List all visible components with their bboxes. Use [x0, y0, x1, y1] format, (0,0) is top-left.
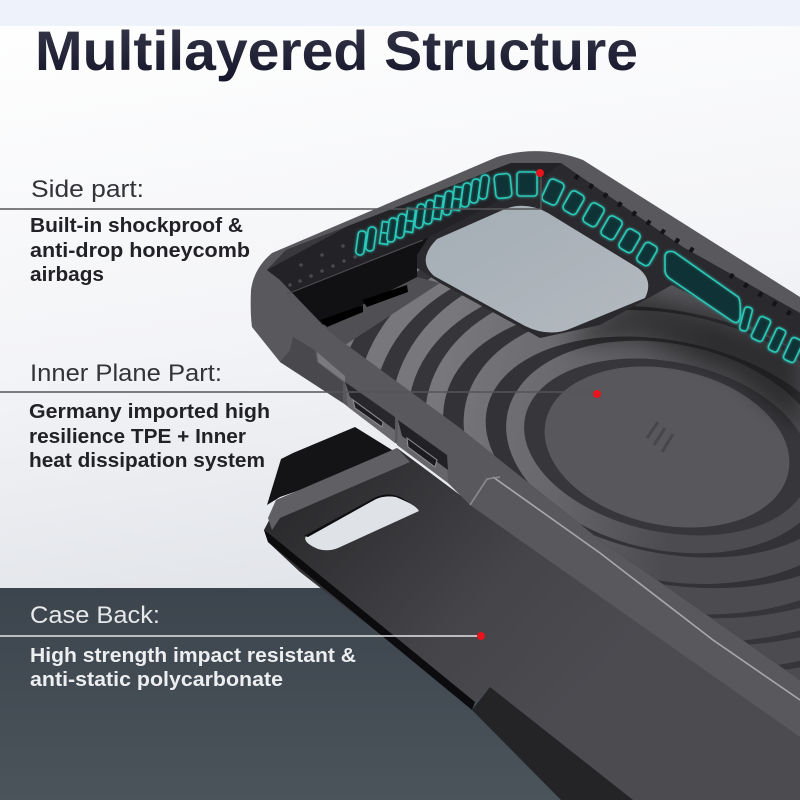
label: inner plane part: Inner Plane Part:: [30, 360, 222, 387]
text: case back description: [30, 645, 356, 691]
text: inner plane part description: heat dissipation system: [29, 450, 265, 472]
panel: case back band: [0, 588, 800, 800]
logo marks: [647, 422, 673, 452]
back plate dark left edge: [264, 530, 475, 710]
honeycomb airbags: [355, 172, 800, 363]
cavity light line: [287, 240, 423, 294]
side notch: [470, 477, 500, 505]
text: side part description: anti-drop honeycomb: [30, 240, 250, 262]
callout: case back: [0, 602, 485, 691]
dot: inner plane part: [593, 390, 601, 398]
text: inner plane part description: Germany imported high: [29, 401, 270, 423]
text: case back description: anti-static polycarbonate: [30, 669, 283, 691]
magnetic circle: [544, 366, 790, 528]
dot: side part: [536, 169, 544, 177]
text: inner plane part description: resilience TPE + Inner: [29, 426, 246, 448]
back plate top strip: [268, 448, 410, 530]
rim ticks: [575, 176, 800, 320]
camera slot shadow: [304, 494, 412, 537]
leader line: inner plane part: [0, 391, 597, 393]
case back layer: [264, 427, 800, 800]
text: side part description: [30, 215, 250, 286]
cavity: [291, 237, 428, 325]
label: side part: Side part:: [31, 176, 144, 203]
back flange: [267, 427, 400, 505]
back bottom lip: [472, 687, 633, 800]
inner floor rings: [267, 163, 800, 680]
title: Multilayered Structure: [35, 19, 638, 82]
callout: inner plane part: [0, 360, 601, 472]
text: case back description: High strength impact resistant &: [30, 645, 356, 667]
cavity slots: [320, 285, 408, 327]
volume button lower: [397, 420, 448, 483]
side recess: [280, 337, 343, 403]
lower rim details: [280, 337, 800, 700]
leader line: case back: [0, 635, 481, 637]
leader line: side part: [0, 172, 541, 209]
dark zone around camera: [405, 163, 800, 352]
text: side part description: Built-in shockproof &: [30, 215, 243, 237]
text: inner plane part description: [29, 401, 270, 472]
text: side part description: airbags: [30, 264, 104, 286]
speaker dots: [288, 244, 357, 287]
floor piece near cavity: [323, 277, 440, 345]
back plate: [264, 448, 800, 800]
callout: side part: [0, 169, 544, 286]
volume button upper: [345, 382, 395, 443]
silver rim line: [493, 477, 800, 700]
outer shell: [251, 151, 800, 737]
camera slot: [305, 496, 419, 550]
label: case back: Case Back:: [30, 602, 160, 629]
side light piece: [317, 352, 345, 382]
camera cutout: [426, 206, 648, 333]
dot: case back: [477, 632, 485, 640]
upper right shade: [560, 290, 800, 430]
speaker wall: [268, 164, 510, 292]
inner plane case: [250, 151, 800, 737]
